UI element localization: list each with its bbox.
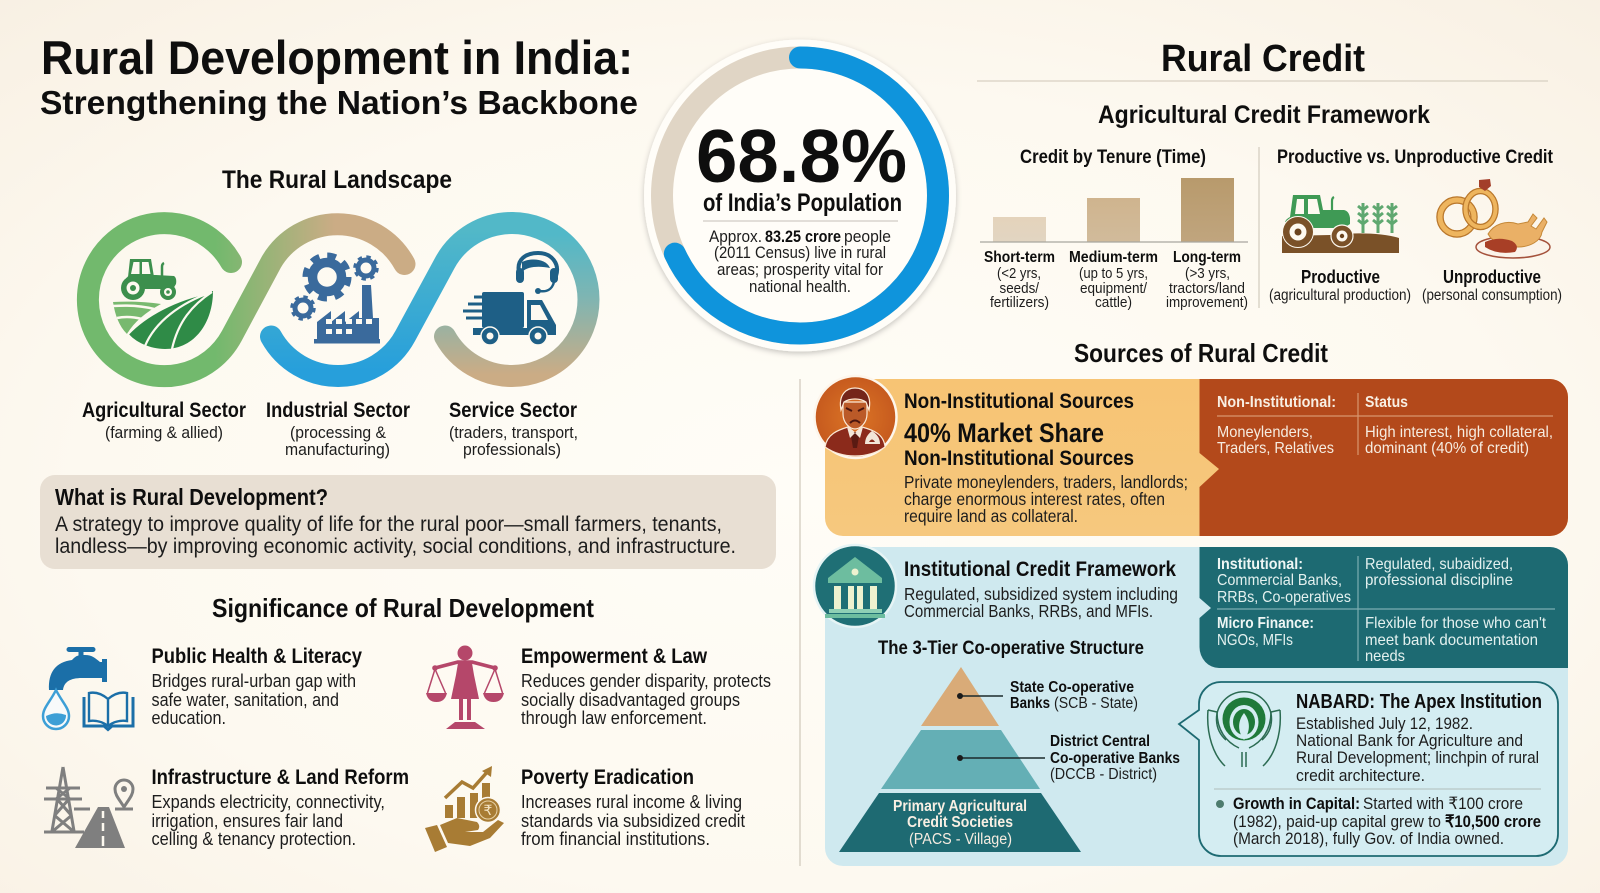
productive vs unproductive credit: (personal consumption) — [1422, 287, 1562, 304]
callout: NABARD: (March 2018), fully Gov. of India owned. — [1233, 829, 1504, 848]
table: non-institutional status: Status — [1365, 394, 1408, 411]
donut stat: 68.8% of population: national health. — [749, 278, 851, 296]
icon: NABARD logo — [1208, 692, 1280, 767]
callout: NABARD: NABARD: The Apex Institution — [1296, 691, 1542, 713]
callout: NABARD: National Bank for Agriculture and — [1296, 731, 1523, 750]
panel: what is rural development: A strategy to improve quality of life for the rural poor—small farmers, tenants, — [55, 513, 722, 536]
pyramid: 3-tier co-operative structure — [839, 638, 1180, 852]
panel: institutional credit framework: Institutional Credit Framework — [904, 558, 1176, 581]
icon: moneylender avatar — [814, 376, 896, 458]
productive vs unproductive credit: (agricultural production) — [1269, 287, 1411, 304]
pyramid: 3-tier co-operative structure: Credit Societies — [907, 814, 1013, 831]
table: institutional and micro finance: meet bank documentation — [1365, 632, 1538, 649]
productive vs unproductive credit: Productive — [1301, 267, 1380, 287]
sector label: industrial: Industrial Sector — [266, 399, 410, 422]
heading: The Rural Landscape: The Rural Landscape — [222, 166, 452, 194]
callout: NABARD — [1179, 682, 1558, 856]
callout: NABARD: (1982), paid-up capital grew to — [1233, 812, 1441, 831]
chart: credit by tenure: seeds/ — [1000, 280, 1040, 297]
callout: NABARD: Rural Development; linchpin of rural — [1296, 748, 1539, 767]
pyramid: 3-tier co-operative structure: (PACS - Village) — [909, 831, 1012, 848]
chart: credit by tenure: (>3 yrs, — [1185, 265, 1230, 282]
chart: credit by tenure: improvement) — [1166, 294, 1248, 311]
callout: NABARD: credit architecture. — [1296, 766, 1425, 785]
chart: credit by tenure: Long-term — [1173, 249, 1241, 266]
table: institutional and micro finance: Regulated, subaidized, — [1365, 556, 1513, 573]
table: institutional and micro finance: Flexible for those who can't — [1365, 615, 1547, 632]
icon: gears and factory — [292, 256, 380, 344]
significance: infrastructure and land reform — [44, 766, 409, 849]
table: non-institutional status: dominant (40% of credit) — [1365, 440, 1529, 457]
icon: bank building — [814, 545, 896, 627]
significance: infrastructure and land reform: Expands electricity, connectivity, — [152, 792, 385, 812]
infinity ribbon with sector icons — [88, 223, 588, 376]
table: non-institutional status: Moneylenders, — [1217, 424, 1313, 441]
table: non-institutional status: Traders, Relatives — [1217, 440, 1334, 457]
productive vs unproductive credit: Unproductive — [1443, 267, 1541, 287]
significance: infrastructure and land reform: celling & tenancy protection. — [152, 829, 356, 849]
icon: pylon, road and pin — [44, 767, 133, 848]
pyramid: 3-tier co-operative structure: Banks — [1010, 695, 1050, 712]
pyramid: 3-tier co-operative structure: Co-operative Banks — [1050, 750, 1180, 767]
sector label: service — [449, 399, 578, 459]
significance: poverty eradication: ₹ — [484, 802, 493, 818]
chart: credit by tenure: equipment/ — [1080, 280, 1148, 297]
chart: credit by tenure: fertilizers) — [990, 294, 1049, 311]
icon: tractor with crops — [1282, 195, 1399, 253]
significance: empowerment and law: Reduces gender disparity, protects — [521, 671, 771, 691]
panel: what is rural development — [40, 475, 776, 569]
chart: credit by tenure: Medium-term — [1069, 249, 1158, 266]
table: institutional and micro finance: Commercial Banks, — [1217, 572, 1342, 589]
callout: NABARD: Started with ₹100 crore — [1363, 794, 1523, 813]
sector label: industrial — [266, 399, 410, 459]
table: institutional and micro finance: professional discipline — [1365, 572, 1513, 589]
callout: NABARD: Growth in Capital: — [1233, 794, 1360, 813]
icon: tap, drop and book — [43, 650, 133, 730]
significance: empowerment and law — [426, 645, 771, 729]
panel: non-institutional sources: 40% Market Share — [904, 418, 1104, 448]
donut stat: 68.8% of population: (2011 Census) live in rural — [714, 244, 886, 262]
icon: rings and roast chicken — [1440, 179, 1550, 258]
pyramid: 3-tier co-operative structure: District Central — [1050, 733, 1150, 750]
donut stat: 68.8% of population: people — [844, 228, 891, 246]
sector label: industrial: manufacturing) — [285, 440, 390, 459]
pyramid: 3-tier co-operative structure: State Co-operative — [1010, 679, 1134, 696]
heading: significance: Significance of Rural Development — [212, 593, 594, 623]
significance: public health and literacy: Public Health & Literacy — [152, 645, 362, 668]
significance: infrastructure and land reform: irrigation, ensures fair land — [152, 811, 343, 831]
heading: agricultural credit framework: Agricultural Credit Framework — [1098, 101, 1430, 129]
heading: rural credit: Rural Credit — [1161, 38, 1365, 80]
icon: hand with coin and rising chart — [425, 766, 504, 852]
significance: public health and literacy: education. — [152, 708, 226, 728]
sector label: agricultural: (farming & allied) — [105, 423, 223, 442]
productive vs unproductive credit — [1269, 147, 1562, 304]
panel: non-institutional sources: require land as collateral. — [904, 506, 1078, 526]
significance: poverty eradication: from financial institutions. — [521, 829, 710, 849]
callout: NABARD: ₹10,500 crore — [1445, 812, 1541, 831]
donut stat: 68.8% of population: of India’s Population — [703, 189, 902, 217]
significance: poverty eradication: Poverty Eradication — [521, 766, 694, 789]
significance: empowerment and law: socially disadvantaged groups — [521, 690, 740, 710]
panel: non-institutional sources — [814, 376, 1568, 536]
panel: institutional credit framework: Commercial Banks, RRBs, and MFIs. — [904, 601, 1153, 621]
panel: institutional credit framework — [814, 545, 1568, 866]
donut stat: 68.8% of population: Approx. — [709, 228, 762, 246]
title: Rural Development in India: — [41, 31, 633, 84]
significance: infrastructure and land reform: Infrastructure & Land Reform — [152, 766, 409, 789]
donut stat: 68.8% of population: 83.25 crore — [765, 228, 841, 246]
chart: credit by tenure: cattle) — [1095, 294, 1132, 311]
table: institutional and micro finance: Micro Finance: — [1217, 615, 1314, 632]
significance: empowerment and law: through law enforcement. — [521, 708, 707, 728]
sector label: industrial: (processing & — [290, 423, 387, 442]
significance: public health and literacy — [43, 645, 362, 730]
donut stat: 68.8% of population — [644, 40, 956, 352]
chart: credit by tenure: (up to 5 yrs, — [1079, 265, 1148, 282]
pyramid: 3-tier co-operative structure: (DCCB - District) — [1050, 766, 1157, 783]
sector label: agricultural: Agricultural Sector — [82, 399, 246, 422]
panel: institutional credit framework: Regulated, subsidized system including — [904, 584, 1178, 604]
panel: non-institutional sources: charge enormous interest rates, often — [904, 489, 1165, 509]
sector label: service: Service Sector — [449, 399, 577, 422]
significance: empowerment and law: Empowerment & Law — [521, 645, 708, 668]
chart: credit by tenure: tractors/land — [1169, 280, 1245, 297]
panel: non-institutional sources: Private moneylenders, traders, landlords; — [904, 472, 1188, 492]
significance: poverty eradication — [425, 766, 745, 852]
donut stat: 68.8% of population: 68.8% — [696, 114, 907, 198]
table: institutional and micro finance: needs — [1365, 648, 1405, 665]
panel: non-institutional sources: Non-Institutional Sources — [904, 447, 1134, 470]
panel: what is rural development: What is Rural Development? — [55, 484, 328, 510]
icon: delivery truck and headset — [463, 253, 558, 345]
significance: public health and literacy: safe water, sanitation, and — [152, 690, 339, 710]
table: non-institutional status: High interest, high collateral, — [1365, 424, 1553, 441]
pyramid: 3-tier co-operative structure: (SCB - State) — [1054, 695, 1138, 712]
table: institutional and micro finance — [1217, 556, 1555, 665]
significance: poverty eradication: standards via subsidized credit — [521, 811, 745, 831]
panel: non-institutional sources: Non-Institutional Sources — [904, 390, 1134, 413]
chart: credit by tenure: Credit by Tenure (Time) — [1020, 147, 1206, 168]
pyramid: 3-tier co-operative structure: The 3-Tier Co-operative Structure — [878, 638, 1144, 659]
icon: tractor and field — [113, 259, 213, 349]
productive vs unproductive credit: Productive vs. Unproductive Credit — [1277, 147, 1554, 168]
sector label: service: professionals) — [463, 440, 561, 459]
chart: credit by tenure: (<2 yrs, — [997, 265, 1041, 282]
table: institutional and micro finance: Institutional: — [1217, 556, 1303, 573]
table: institutional and micro finance: RRBs, Co-operatives — [1217, 589, 1351, 606]
callout: NABARD: Established July 12, 1982. — [1296, 714, 1473, 733]
chart: credit by tenure: Short-term — [984, 249, 1055, 266]
table: institutional and micro finance: NGOs, MFIs — [1217, 632, 1293, 649]
title: Strengthening the Nation’s Backbone — [40, 84, 638, 121]
sector label: agricultural — [82, 399, 246, 442]
significance: poverty eradication: Increases rural income & living — [521, 792, 742, 812]
table: non-institutional status — [1217, 393, 1553, 457]
sector label: service: (traders, transport, — [449, 423, 578, 442]
significance: public health and literacy: Bridges rural-urban gap with — [152, 671, 356, 691]
table: non-institutional status: Non-Institutional: — [1217, 394, 1336, 411]
chart: credit by tenure — [980, 147, 1248, 311]
title — [40, 31, 638, 121]
pyramid: 3-tier co-operative structure: Primary Agricultural — [893, 798, 1027, 815]
heading: sources of rural credit: Sources of Rural Credit — [1074, 338, 1328, 368]
donut stat: 68.8% of population: areas; prosperity vital for — [717, 261, 883, 279]
icon: woman with scales — [426, 646, 504, 729]
panel: what is rural development: landless—by improving economic activity, social conditions, and infrastructure. — [55, 535, 736, 558]
